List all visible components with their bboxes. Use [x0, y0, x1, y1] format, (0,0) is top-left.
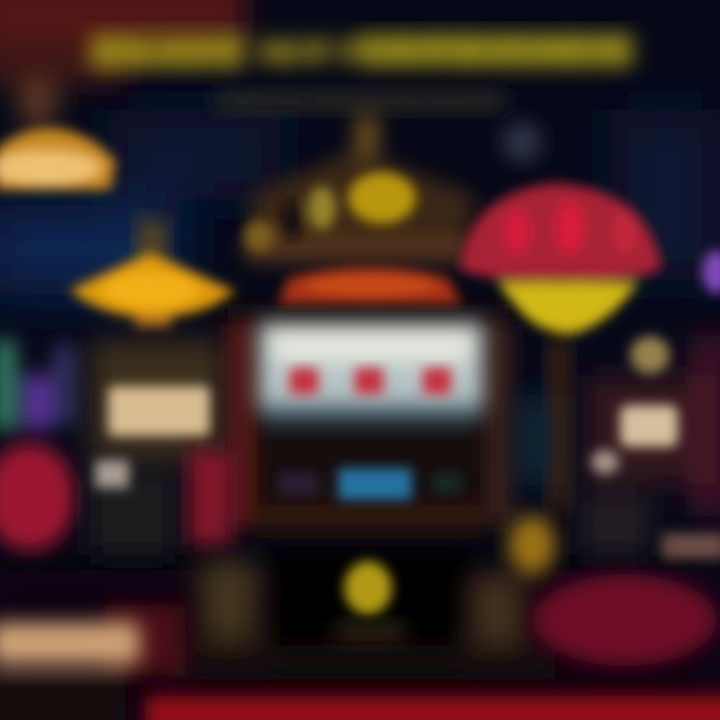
control panel	[278, 468, 462, 500]
machine topper	[278, 267, 462, 304]
left small slot machine	[90, 340, 225, 555]
right side figures and machine	[522, 335, 720, 559]
bottom-left table	[0, 622, 140, 720]
reel symbols	[290, 368, 451, 394]
coin emblem	[344, 561, 392, 615]
left neon lights	[0, 340, 76, 430]
red drape	[188, 450, 232, 545]
machine base legs	[175, 560, 555, 679]
left red stool	[0, 443, 76, 551]
red carpet floor	[105, 574, 720, 720]
gold orb	[508, 515, 556, 575]
icon: left yellow lamp	[70, 220, 236, 328]
subtitle: Casino Winning Guide	[220, 92, 500, 111]
icon: right red dome lamp	[460, 122, 662, 510]
reels screen	[258, 322, 484, 424]
machine cabinet	[228, 305, 512, 680]
central slot machine	[228, 267, 512, 680]
title	[88, 33, 633, 72]
top-left red chandelier	[0, 0, 245, 125]
subtitle	[215, 90, 505, 112]
icon: left ceiling lamp	[0, 128, 116, 190]
title: SLOT STRATEGIES	[88, 34, 632, 72]
icon: central golden crown	[244, 115, 475, 262]
icon: purple light	[702, 250, 720, 294]
